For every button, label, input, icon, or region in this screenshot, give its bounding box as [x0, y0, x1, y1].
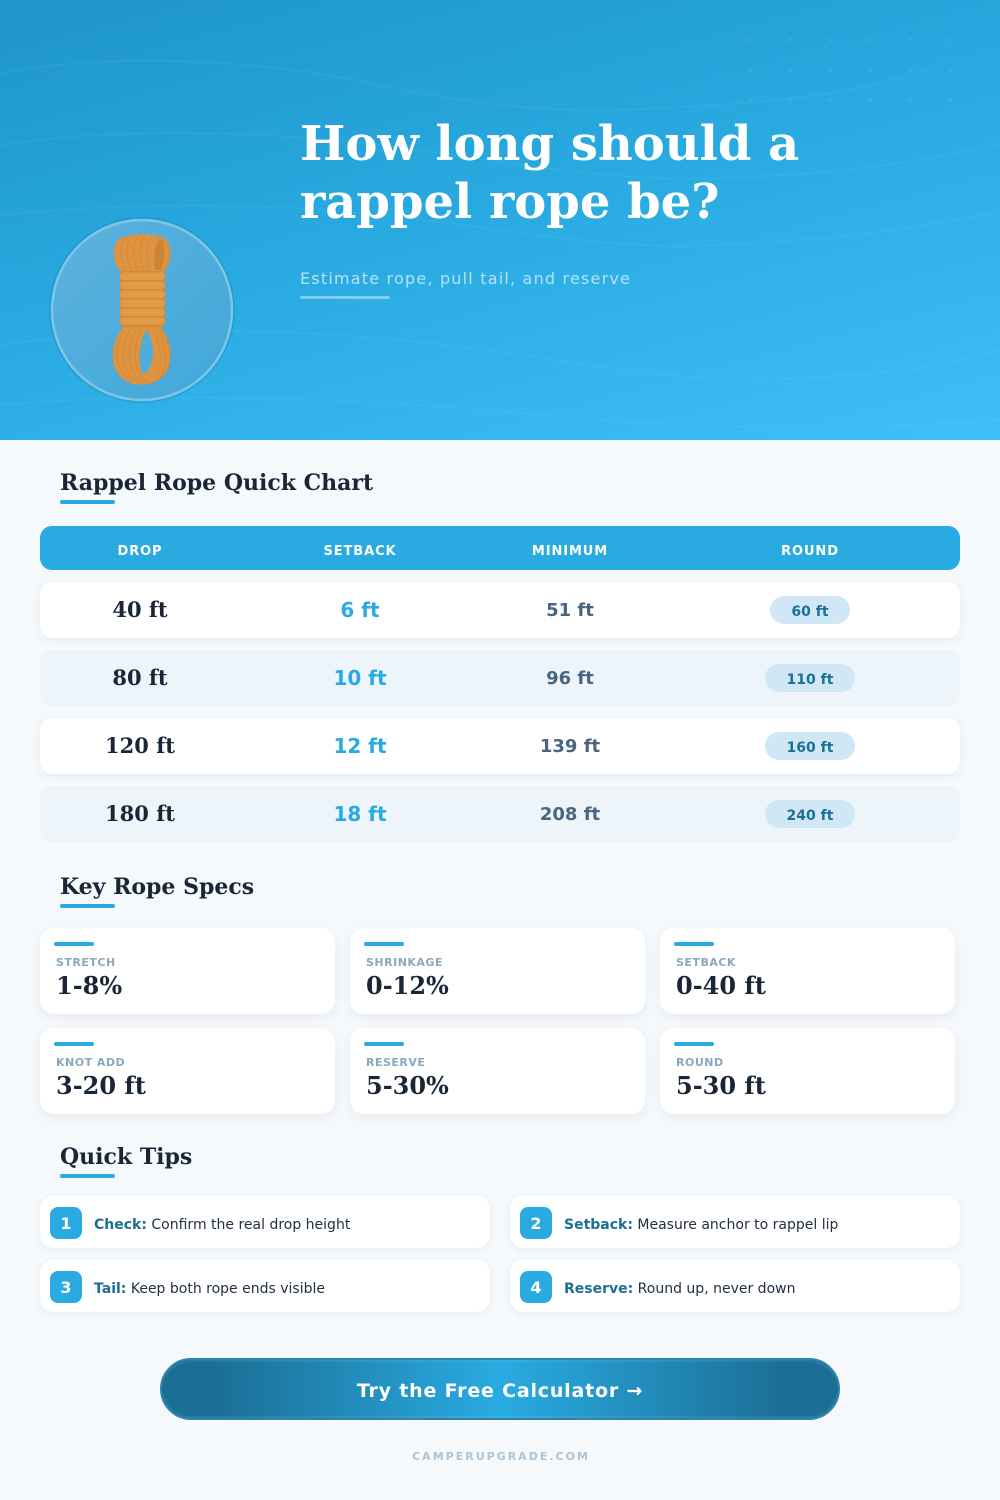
table row 40 ft [40, 582, 960, 638]
spec card: knot add: KNOT ADD [56, 1056, 125, 1069]
tip 2: 2 [530, 1214, 542, 1233]
wraps [120, 271, 165, 327]
table row 180 ft [40, 786, 960, 842]
tip 4 [510, 1260, 960, 1312]
table row 40 ft: 6 ft [340, 598, 380, 622]
hero background waves and dots [0, 38, 1000, 406]
spec card: reserve: 5-30% [366, 1071, 449, 1100]
table row 80 ft: 10 ft [333, 666, 387, 690]
tip 4: 4 [530, 1278, 542, 1297]
table row 120 ft: 12 ft [333, 734, 387, 758]
table row 80 ft: 96 ft [546, 668, 594, 689]
tip 2: Setback: Measure anchor to rappel lip [564, 1217, 838, 1233]
call to action button [160, 1358, 840, 1420]
top loop [114, 234, 171, 272]
table row 40 ft: 60 ft [791, 604, 829, 620]
subtitle underline [300, 296, 390, 299]
tip 3: Tail: Keep both rope ends visible [94, 1281, 325, 1297]
icon: rope coil in circle [49, 217, 235, 403]
spec card: setback [660, 928, 955, 1014]
spec card: setback: 0-40 ft [676, 971, 766, 1000]
subtitle: Estimate rope, pull tail, and reserve [300, 269, 631, 288]
tip 4: Reserve: Round up, never down [564, 1281, 795, 1297]
table row 180 ft: 180 ft [105, 801, 175, 826]
table header: SETBACK [324, 544, 396, 559]
table row 180 ft: 240 ft [787, 808, 833, 824]
heading: quick chart: Rappel Rope Quick Chart [60, 470, 373, 496]
spec card: stretch: STRETCH [56, 956, 116, 969]
table row 180 ft: 208 ft [540, 804, 600, 825]
spec card: stretch [40, 928, 335, 1014]
heading: quick tips: Quick Tips [60, 1144, 192, 1170]
spec card: shrinkage [350, 928, 645, 1014]
spec card: round: ROUND [676, 1056, 724, 1069]
table header: MINIMUM [532, 544, 608, 559]
table row 180 ft: 18 ft [333, 802, 387, 826]
spec card: knot add: 3-20 ft [56, 1071, 146, 1100]
title: rappel rope be? [300, 174, 719, 230]
title: How long should a [300, 116, 799, 172]
table row 80 ft: 80 ft [112, 665, 168, 690]
hero banner [0, 0, 1000, 440]
bottom loop [113, 326, 171, 385]
tip 2 [510, 1196, 960, 1248]
table row 120 ft: 139 ft [540, 736, 600, 757]
spec card: shrinkage: SHRINKAGE [366, 956, 443, 969]
spec card: round [660, 1028, 955, 1114]
tip 1: Check: Confirm the real drop height [94, 1217, 350, 1233]
spec card: round: 5-30 ft [676, 1071, 766, 1100]
spec card: setback: SETBACK [676, 956, 736, 969]
spec card: stretch: 1-8% [56, 971, 122, 1000]
spec card: shrinkage: 0-12% [366, 971, 449, 1000]
footer site name: CAMPERUPGRADE.COM [412, 1450, 590, 1463]
spec card: knot add [40, 1028, 335, 1114]
tip 1 [40, 1196, 490, 1248]
table row 120 ft [40, 718, 960, 774]
table row 40 ft: 51 ft [546, 600, 594, 621]
table row 40 ft: 40 ft [112, 597, 168, 622]
table row 80 ft: 110 ft [787, 672, 833, 688]
tip 1: 1 [60, 1214, 72, 1233]
call to action button: Try the Free Calculator → [357, 1380, 643, 1402]
table header: DROP [118, 544, 162, 559]
table row 120 ft: 120 ft [105, 733, 175, 758]
table row 80 ft [40, 650, 960, 706]
spec card: reserve: RESERVE [366, 1056, 425, 1069]
tip 3 [40, 1260, 490, 1312]
table header: ROUND [781, 544, 839, 559]
tip 3: 3 [60, 1278, 72, 1297]
table header [40, 526, 960, 570]
title [300, 116, 799, 230]
table row 120 ft: 160 ft [787, 740, 833, 756]
heading: key rope specs: Key Rope Specs [60, 874, 254, 900]
spec card: reserve [350, 1028, 645, 1114]
